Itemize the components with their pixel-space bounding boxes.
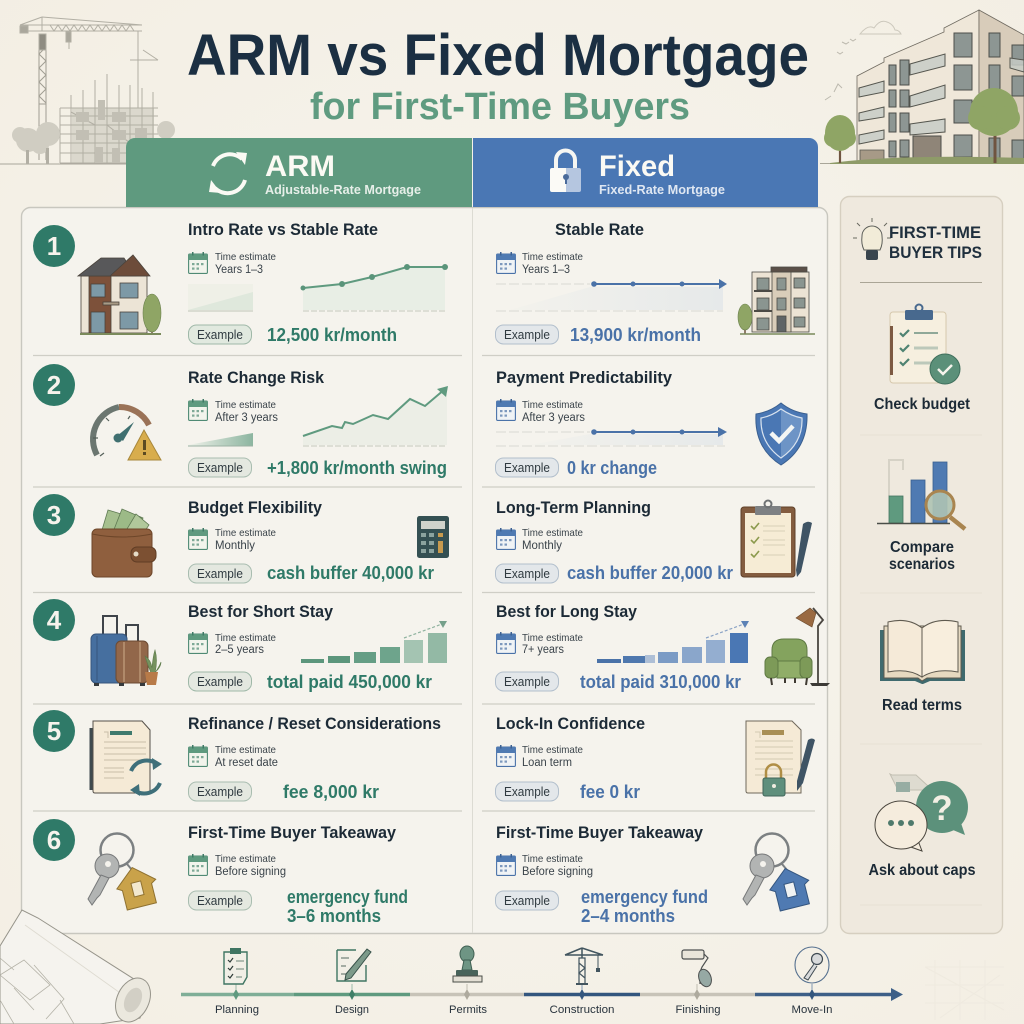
example pill (496, 325, 558, 344)
time estimate: Time estimate (215, 853, 276, 865)
heading: First-Time Buyer Takeaway (188, 823, 397, 842)
time estimate: Before signing (522, 866, 593, 878)
tip label (889, 539, 955, 573)
column header: ARM (126, 138, 472, 207)
example value: fee 8,000 kr (283, 782, 379, 802)
icon: tree (80, 294, 161, 334)
example pill (188, 782, 252, 801)
Fixed subheading: Fixed-Rate Mortgage (599, 182, 725, 197)
time estimate: Time estimate (522, 632, 583, 644)
icon: speech bubbles: ? (931, 789, 953, 828)
example value (581, 887, 708, 926)
time estimate: After 3 years (522, 412, 585, 424)
time estimate (189, 527, 276, 552)
step: permits: Permits (449, 1004, 488, 1016)
heading: Rate Change Risk (188, 368, 325, 387)
heading: Best for Short Stay (188, 602, 334, 621)
time estimate: Years 1–3 (522, 264, 570, 276)
time estimate (189, 744, 278, 769)
icon: keys with blue house tag (743, 834, 814, 912)
step: permits (449, 946, 488, 1016)
panel: first-time buyer tips (840, 196, 1002, 934)
small area chart (188, 284, 253, 311)
time estimate: Time estimate (522, 744, 583, 756)
row 2 ARM (33, 364, 448, 478)
icon: open book (880, 620, 965, 684)
number badge 2 (33, 364, 75, 406)
example pill (496, 782, 558, 801)
step: design: Design (335, 1004, 369, 1016)
flat payment chart (496, 427, 727, 446)
example value: 2–4 months (581, 906, 675, 926)
process timeline (181, 946, 903, 1016)
timeline arrow (181, 988, 903, 1001)
title: ARM vs Fixed Mortgage (187, 23, 809, 88)
example value: cash buffer 40,000 kr (267, 563, 434, 583)
heading: Long-Term Planning (496, 498, 651, 517)
icon: light bulb (853, 218, 891, 260)
bar chart (597, 621, 749, 663)
example pill: Example (504, 894, 550, 908)
time estimate: Years 1–3 (215, 264, 263, 276)
icon: gauge with warning (93, 407, 161, 460)
step: finishing: Finishing (676, 1004, 720, 1016)
time estimate (189, 632, 276, 656)
time estimate: Time estimate (215, 251, 276, 263)
subtitle: for First-Time Buyers (310, 86, 690, 128)
number badge 5: 5 (47, 716, 61, 746)
example value: emergency fund (581, 887, 708, 907)
time estimate: At reset date (215, 757, 278, 769)
column header: Fixed (473, 138, 818, 207)
small area chart (188, 433, 253, 446)
tip label: Ask about caps (868, 862, 976, 879)
example pill: Example (504, 328, 550, 342)
heading: Budget Flexibility (188, 498, 323, 517)
time estimate: Loan term (522, 757, 572, 769)
ARM heading: ARM (265, 150, 335, 183)
step: move-in (792, 947, 832, 1016)
example value: 0 kr change (567, 458, 657, 478)
icon: house (78, 255, 150, 333)
Fixed heading: Fixed (599, 150, 675, 183)
time estimate: Time estimate (215, 744, 276, 756)
step: planning: Planning (215, 1004, 259, 1016)
example pill: Example (197, 567, 243, 581)
tip label: Compare (890, 539, 954, 556)
example pill: Example (504, 785, 550, 799)
number badge 1 (33, 225, 75, 267)
heading: Lock-In Confidence (496, 714, 645, 733)
number badge 3: 3 (47, 500, 61, 530)
heading: Stable Rate (555, 220, 644, 239)
row 1 ARM (33, 220, 448, 345)
time estimate (497, 853, 593, 878)
number badge 6: 6 (47, 825, 61, 855)
faint blueprint sketch, bottom right (925, 960, 1004, 1020)
icon: wallet with cash (92, 509, 156, 577)
number badge 4 (33, 599, 75, 641)
step: construction (550, 948, 614, 1016)
time estimate: Time estimate (215, 399, 276, 411)
number badge 3 (33, 494, 75, 536)
example value (287, 887, 408, 926)
example value: emergency fund (287, 887, 408, 907)
icon: apartment building (752, 267, 809, 332)
tip label: Read terms (882, 697, 962, 714)
time estimate: Time estimate (215, 632, 276, 644)
time estimate: Time estimate (215, 527, 276, 539)
step: finishing (676, 950, 720, 1016)
example pill: Example (197, 785, 243, 799)
example pill: Example (504, 675, 550, 689)
row 3 Fixed (496, 498, 812, 583)
time estimate: After 3 years (215, 412, 278, 424)
tip label: scenarios (889, 556, 955, 573)
row 4 Fixed (496, 602, 830, 692)
step: design (335, 949, 371, 1016)
row 2 Fixed (496, 368, 807, 478)
step: construction: Construction (550, 1004, 614, 1016)
row 4 ARM (33, 599, 447, 692)
heading: Intro Rate vs Stable Rate (188, 220, 378, 239)
icon: document with refresh arrows (91, 721, 162, 796)
tips heading (889, 223, 982, 262)
example pill: Example (197, 328, 243, 342)
row 6 ARM (33, 819, 408, 926)
icon: calculator (417, 516, 449, 558)
illustration: blueprint roll (0, 910, 157, 1024)
example pill (188, 564, 252, 583)
example value: 12,500 kr/month (267, 325, 397, 345)
example pill: Example (197, 894, 243, 908)
example pill: Example (197, 675, 243, 689)
ARM subheading: Adjustable-Rate Mortgage (265, 182, 421, 197)
row 5 Fixed (496, 714, 815, 802)
time estimate (189, 251, 276, 276)
step: planning (215, 948, 259, 1016)
example value: cash buffer 20,000 kr (567, 563, 733, 583)
row 1 Fixed (496, 220, 815, 345)
example value: total paid 310,000 kr (580, 672, 741, 692)
example pill (188, 891, 252, 910)
example pill: Example (504, 461, 550, 475)
row 3 ARM (33, 494, 449, 583)
time estimate (497, 399, 585, 424)
icon: luggage and plant (91, 616, 161, 686)
heading: Payment Predictability (496, 368, 673, 387)
example pill: Example (504, 567, 550, 581)
row 5 ARM (33, 710, 441, 802)
example value: 3–6 months (287, 906, 381, 926)
time estimate: Time estimate (522, 853, 583, 865)
icon: armchair and lamp (765, 608, 830, 686)
icon: padlock (550, 150, 581, 192)
icon: speech bubbles (875, 774, 968, 851)
example pill (496, 672, 558, 691)
icon: tree (738, 304, 815, 334)
heading: Refinance / Reset Considerations (188, 714, 441, 733)
time estimate (497, 744, 583, 769)
icon: keys with gold house tag (88, 834, 161, 911)
line chart (300, 264, 448, 311)
number badge 1: 1 (47, 231, 61, 261)
rising line chart (303, 386, 448, 446)
heading: First-Time Buyer Takeaway (496, 823, 704, 842)
example pill (188, 458, 252, 477)
illustration: apartment building with trees (820, 10, 1024, 164)
number badge 6 (33, 819, 75, 861)
time estimate: Time estimate (522, 251, 583, 263)
time estimate: Time estimate (522, 527, 583, 539)
time estimate (497, 251, 583, 276)
row 6 Fixed (496, 823, 814, 926)
icon: bars with magnifier (877, 460, 965, 529)
tip label: Check budget (874, 396, 970, 413)
time estimate: Time estimate (522, 399, 583, 411)
example pill (496, 891, 558, 910)
icon: rotating arrows (209, 152, 247, 193)
bar chart (301, 621, 447, 663)
icon: clipboard and pen (741, 500, 812, 577)
example value: total paid 450,000 kr (267, 672, 432, 692)
time estimate: 7+ years (522, 644, 564, 656)
illustration: construction crane and scaffolding (0, 17, 175, 164)
heading: Best for Long Stay (496, 602, 638, 621)
number badge 2: 2 (47, 370, 61, 400)
number badge 4: 4 (47, 605, 62, 635)
time estimate: Before signing (215, 866, 286, 878)
number badge 5 (33, 710, 75, 752)
main comparison panel (22, 208, 828, 934)
example pill (496, 564, 558, 583)
time estimate (497, 632, 583, 656)
icon: shield with check (756, 403, 807, 465)
example value: 13,900 kr/month (570, 325, 701, 345)
time estimate: Monthly (522, 540, 562, 552)
example pill: Example (197, 461, 243, 475)
example pill (496, 458, 558, 477)
tips heading: BUYER TIPS (889, 243, 982, 262)
example value: fee 0 kr (580, 782, 640, 802)
step: move-in: Move-In (792, 1004, 832, 1016)
time estimate: 2–5 years (215, 644, 264, 656)
icon: budget clipboard (890, 304, 960, 384)
tips heading: FIRST-TIME (889, 223, 981, 242)
flat rate chart (496, 279, 727, 311)
example value: +1,800 kr/month swing (267, 458, 447, 478)
example pill (188, 672, 252, 691)
time estimate (497, 527, 583, 552)
time estimate: Monthly (215, 540, 255, 552)
time estimate (189, 853, 286, 878)
example pill (188, 325, 252, 344)
icon: document with lock and pen (746, 721, 815, 796)
time estimate (189, 399, 278, 424)
